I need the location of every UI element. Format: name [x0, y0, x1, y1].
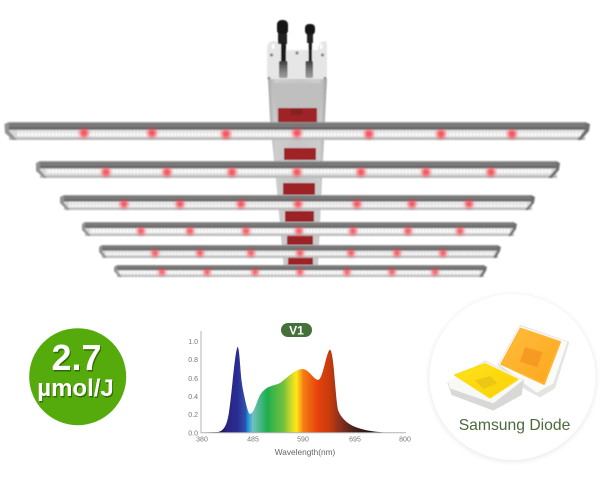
bar 6 [114, 265, 487, 277]
y axis labels: 0.6 [188, 376, 198, 383]
bar 2 [36, 161, 560, 178]
right power connector [305, 24, 315, 78]
post body [268, 79, 327, 270]
x axis labels: 485 [247, 436, 259, 444]
bar 4 [82, 222, 517, 236]
version pill [281, 323, 312, 338]
badge unit: µmol/J [38, 376, 115, 404]
Samsung diode badge [428, 294, 596, 462]
y axis labels: 0.2 [188, 412, 198, 419]
y axis labels: 1.0 [188, 339, 198, 346]
x axis labels: 590 [297, 436, 309, 444]
badge circle [428, 294, 596, 462]
badge value: 2.7 [52, 338, 103, 380]
spectrum chart [188, 323, 411, 457]
x axis labels [196, 436, 411, 444]
efficiency badge: µmol/J [37, 375, 114, 402]
front chip [447, 361, 524, 411]
y axis labels: 0.4 [188, 394, 198, 401]
red panels on post [278, 108, 317, 265]
y axis labels: 0.0 [188, 430, 198, 438]
x axis title: Wavelength(nm) [275, 447, 336, 457]
version pill: V1 [289, 324, 304, 338]
bar 5 [99, 245, 501, 258]
efficiency badge [29, 328, 126, 425]
left power connector [277, 20, 288, 78]
x axis labels: 380 [196, 436, 208, 444]
spectrum curve [205, 347, 384, 432]
top mounting plate [267, 41, 327, 80]
y axis labels: 0.8 [188, 357, 198, 364]
bar 1 [4, 122, 590, 140]
x axis labels: 800 [399, 436, 411, 444]
efficiency badge: 2.7 [51, 337, 102, 378]
central mounting post with connectors [267, 20, 327, 270]
back chip [497, 325, 569, 397]
y axis labels [188, 339, 198, 438]
axes [201, 331, 406, 433]
light bars [4, 122, 590, 277]
x axis labels: 695 [349, 436, 361, 444]
diode illustration [447, 325, 569, 411]
bar 3 [60, 195, 535, 210]
red diodes [80, 128, 516, 275]
badge caption: Samsung Diode [459, 417, 571, 434]
